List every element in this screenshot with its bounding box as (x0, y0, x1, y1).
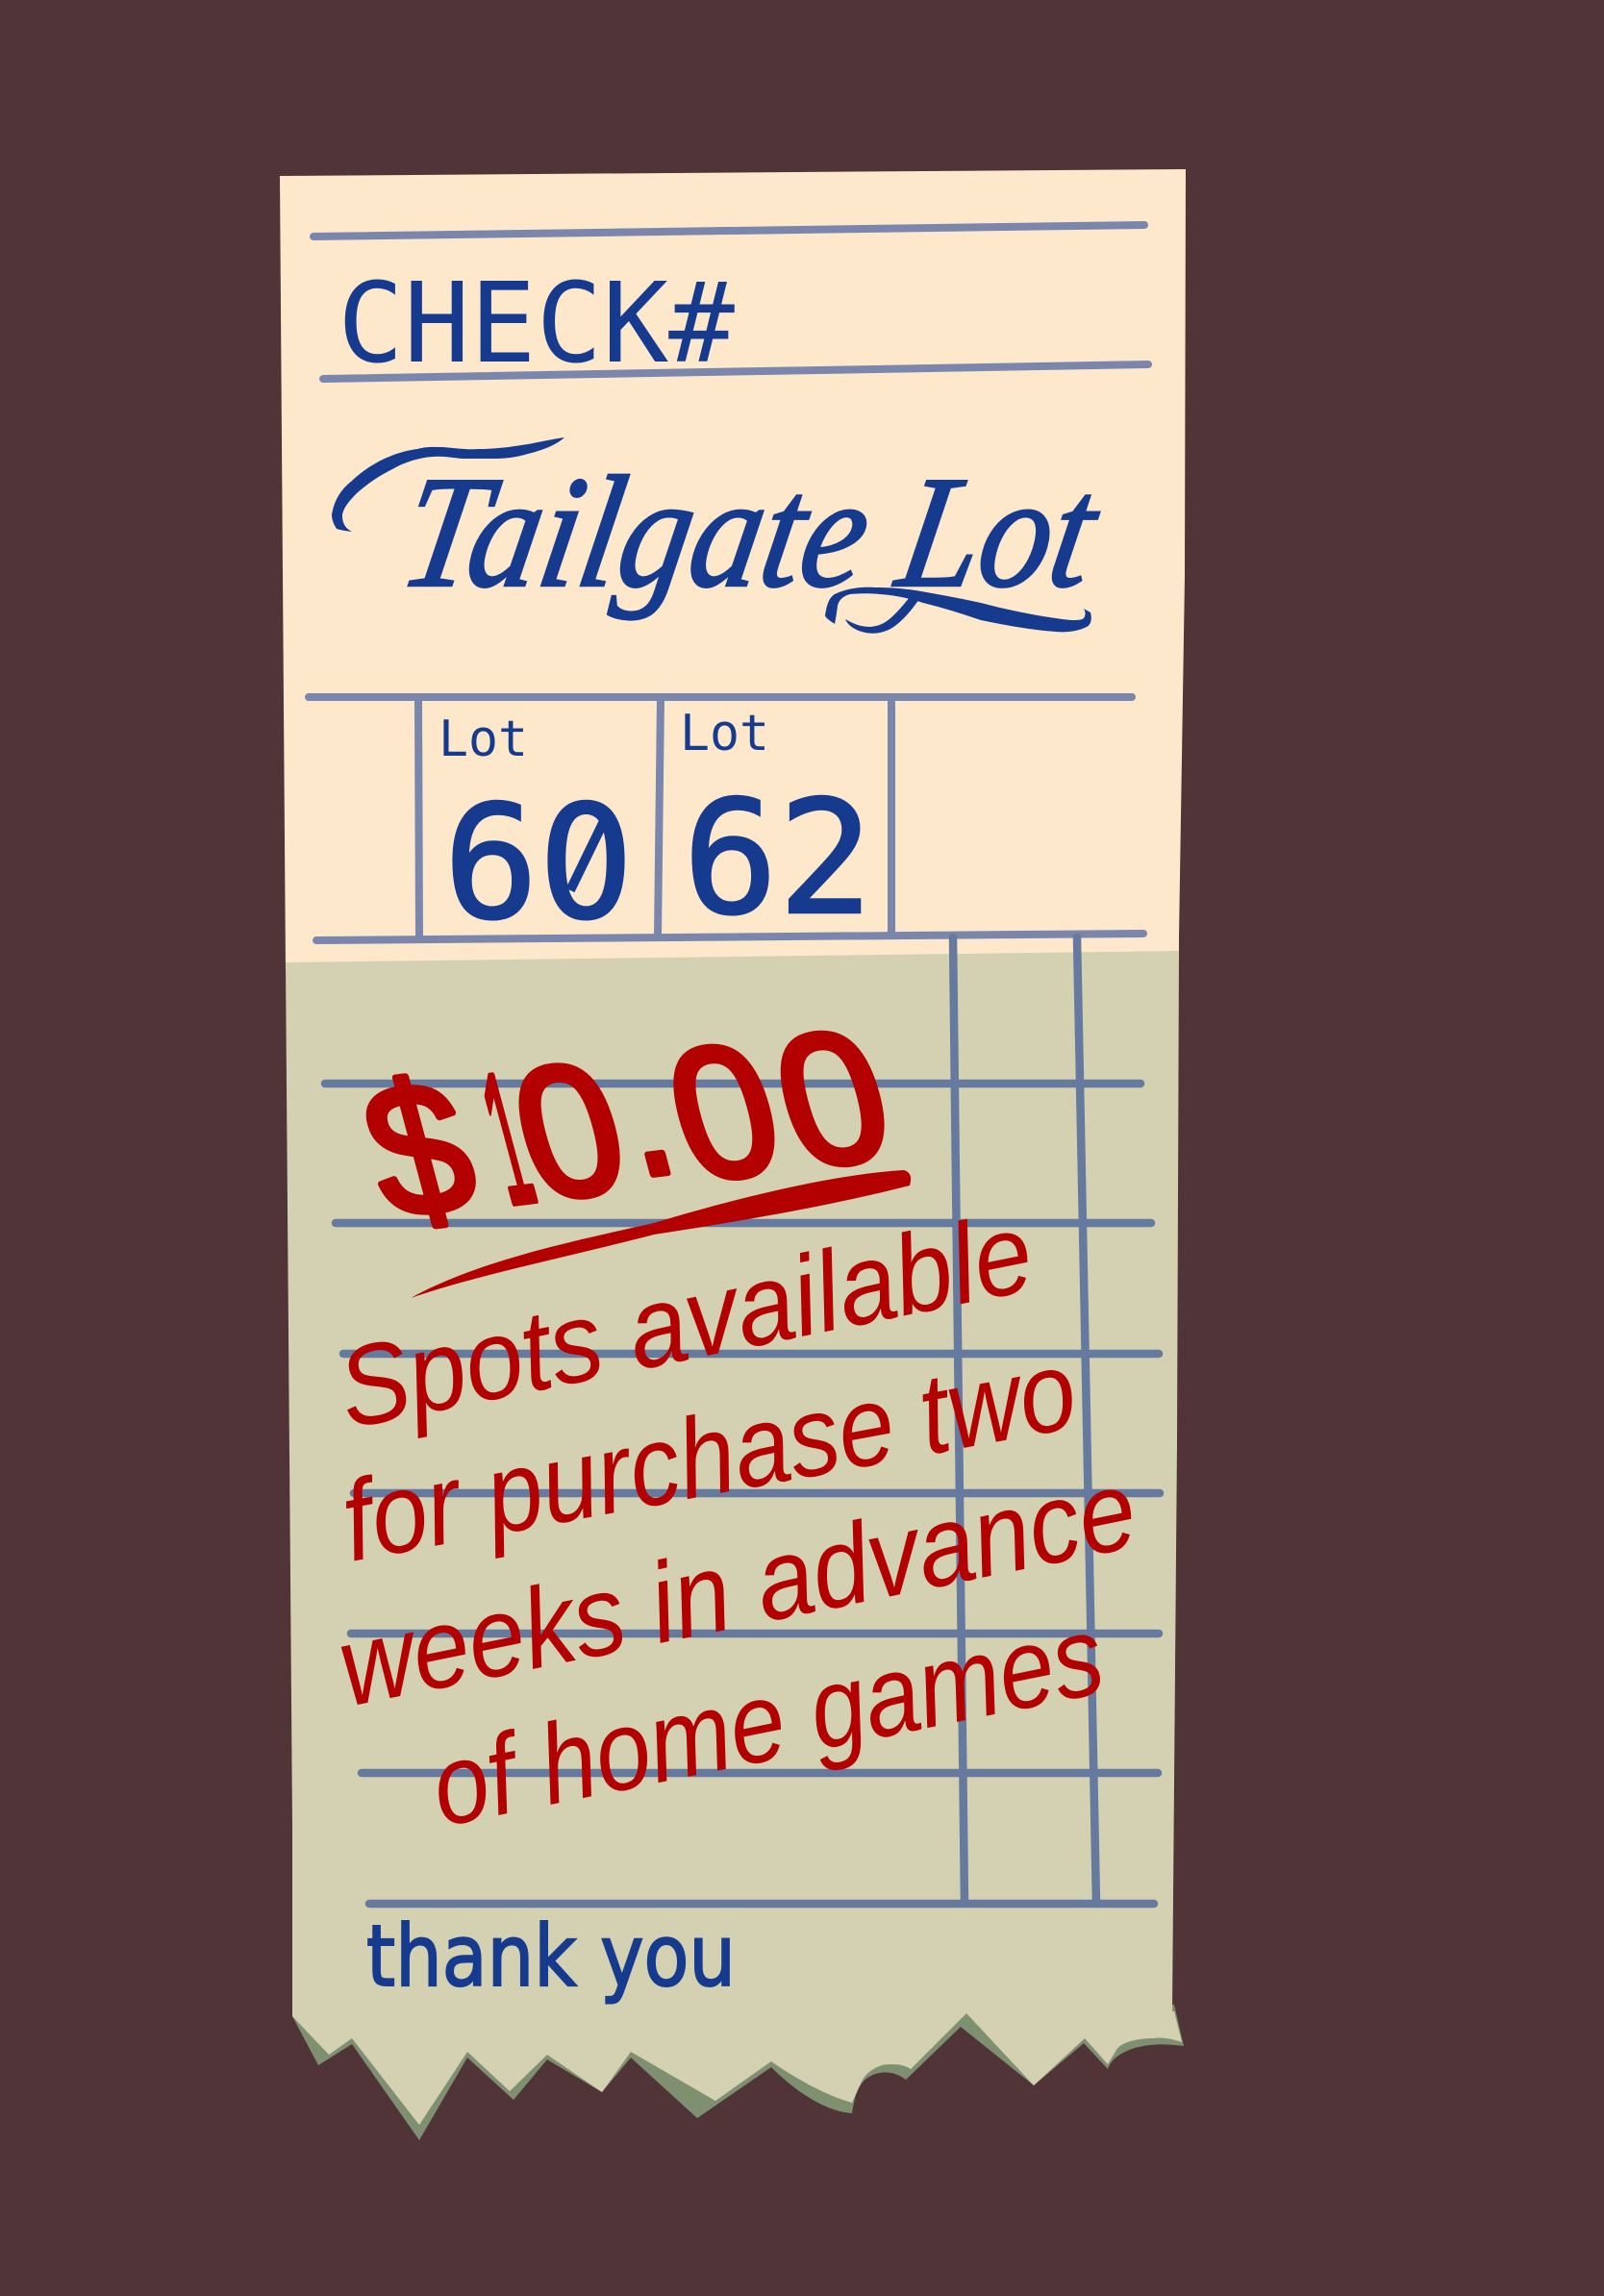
zero slash (570, 823, 603, 890)
price text: $ (344, 1040, 494, 1258)
lot 60 cell (439, 711, 634, 955)
price: $10.00 (340, 979, 911, 1298)
torn edge shadow (292, 2005, 1184, 2140)
title swash over T (332, 437, 564, 532)
lot 62 cell (680, 705, 873, 950)
price text: 0 (755, 990, 911, 1208)
green lower section (286, 951, 1182, 2125)
price text: 0 (647, 1004, 801, 1220)
title text: Tailgate Lot (390, 444, 1112, 621)
cream upper section (280, 169, 1186, 971)
title: Tailgate Lot (332, 437, 1112, 634)
price text: . (594, 1005, 692, 1215)
lot label: Lot (680, 705, 769, 762)
line 1: Spots available (328, 1188, 1042, 1453)
handwritten note (328, 1188, 1146, 1851)
zero dot cover (567, 834, 606, 880)
line 4: of home games (421, 1591, 1114, 1851)
receipt paper (280, 169, 1186, 2140)
price underline (411, 1170, 911, 1298)
ruled lines upper section (309, 225, 1148, 940)
lot number 60: 60 (443, 773, 634, 955)
line 2: for purchase two (333, 1326, 1086, 1586)
heading: check number: CHECK# (338, 260, 736, 388)
price text: 0 (493, 1023, 646, 1239)
title swash under Lot (825, 587, 1091, 632)
footer: thank you: thank you (366, 1907, 736, 2006)
lot label: Lot (439, 711, 528, 768)
price text (340, 979, 911, 1258)
lot number 62: 62 (683, 768, 873, 950)
price text: 1 (464, 1035, 550, 1243)
ruled lines lower section (325, 937, 1160, 1904)
line 3: weeks in advance (328, 1445, 1146, 1731)
title descender swash under Lot (845, 593, 921, 634)
